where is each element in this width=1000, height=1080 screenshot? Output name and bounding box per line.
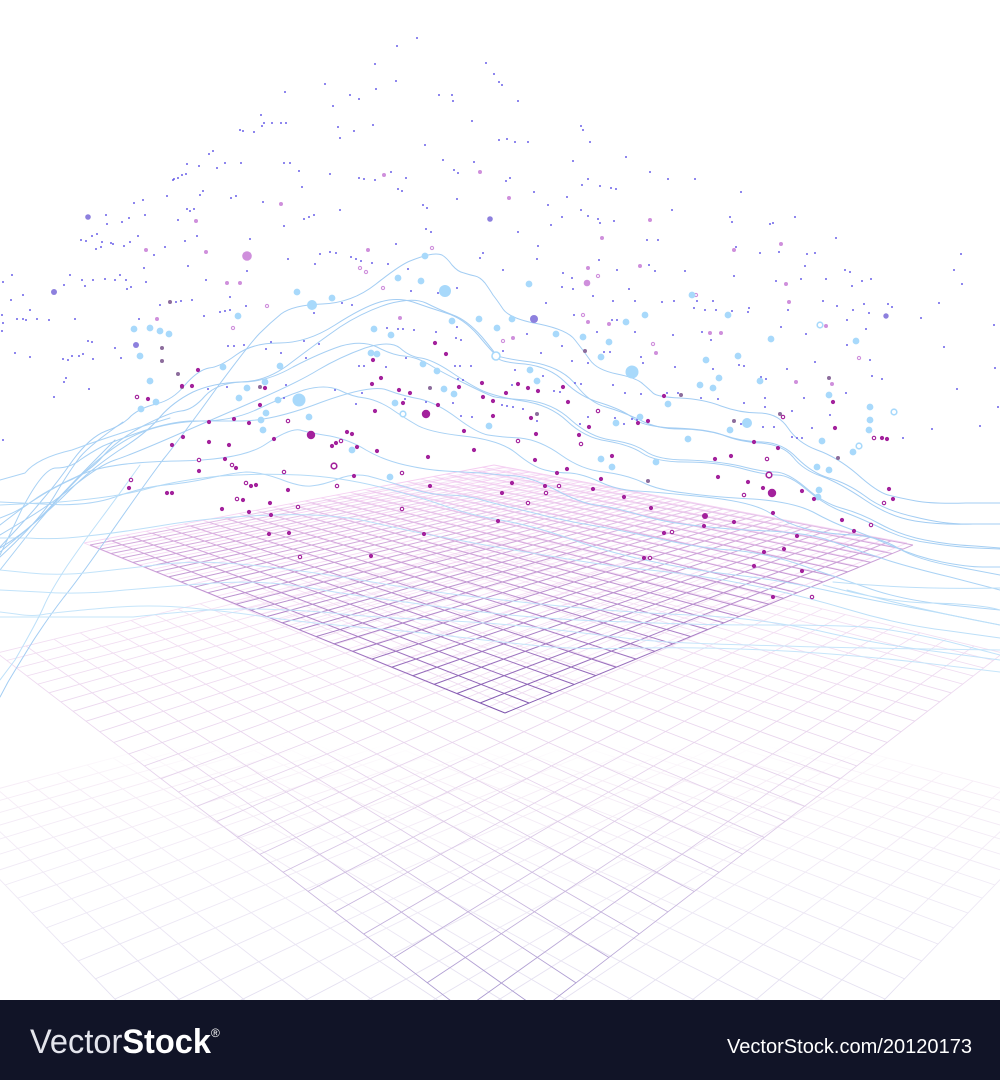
- data points: orchid rings: [231, 246, 861, 360]
- footer band: [0, 1000, 1000, 1080]
- grid: middle pale floor: [0, 531, 1000, 1040]
- data points: light blue bubbles: [134, 256, 870, 497]
- grid: faint outer floor: [0, 654, 1000, 1050]
- data points: tiny violet dots: [2, 38, 998, 440]
- footer image id: VectorStock.com/20120173: [727, 1036, 972, 1058]
- footer logo text: VectorStock: [30, 1023, 211, 1061]
- data points: magenta dots: [129, 343, 893, 597]
- data points: violet large dots: [51, 214, 889, 348]
- data points: orchid dots: [146, 172, 832, 384]
- data points: magenta rings: [129, 395, 886, 599]
- data points: light blue rings: [400, 322, 897, 449]
- registered mark: ®: [211, 1026, 220, 1040]
- wave lines: blue data terrain: [0, 254, 1000, 697]
- data points: mauve dots: [160, 300, 840, 483]
- grid: upper magenta to purple plane: [84, 465, 913, 713]
